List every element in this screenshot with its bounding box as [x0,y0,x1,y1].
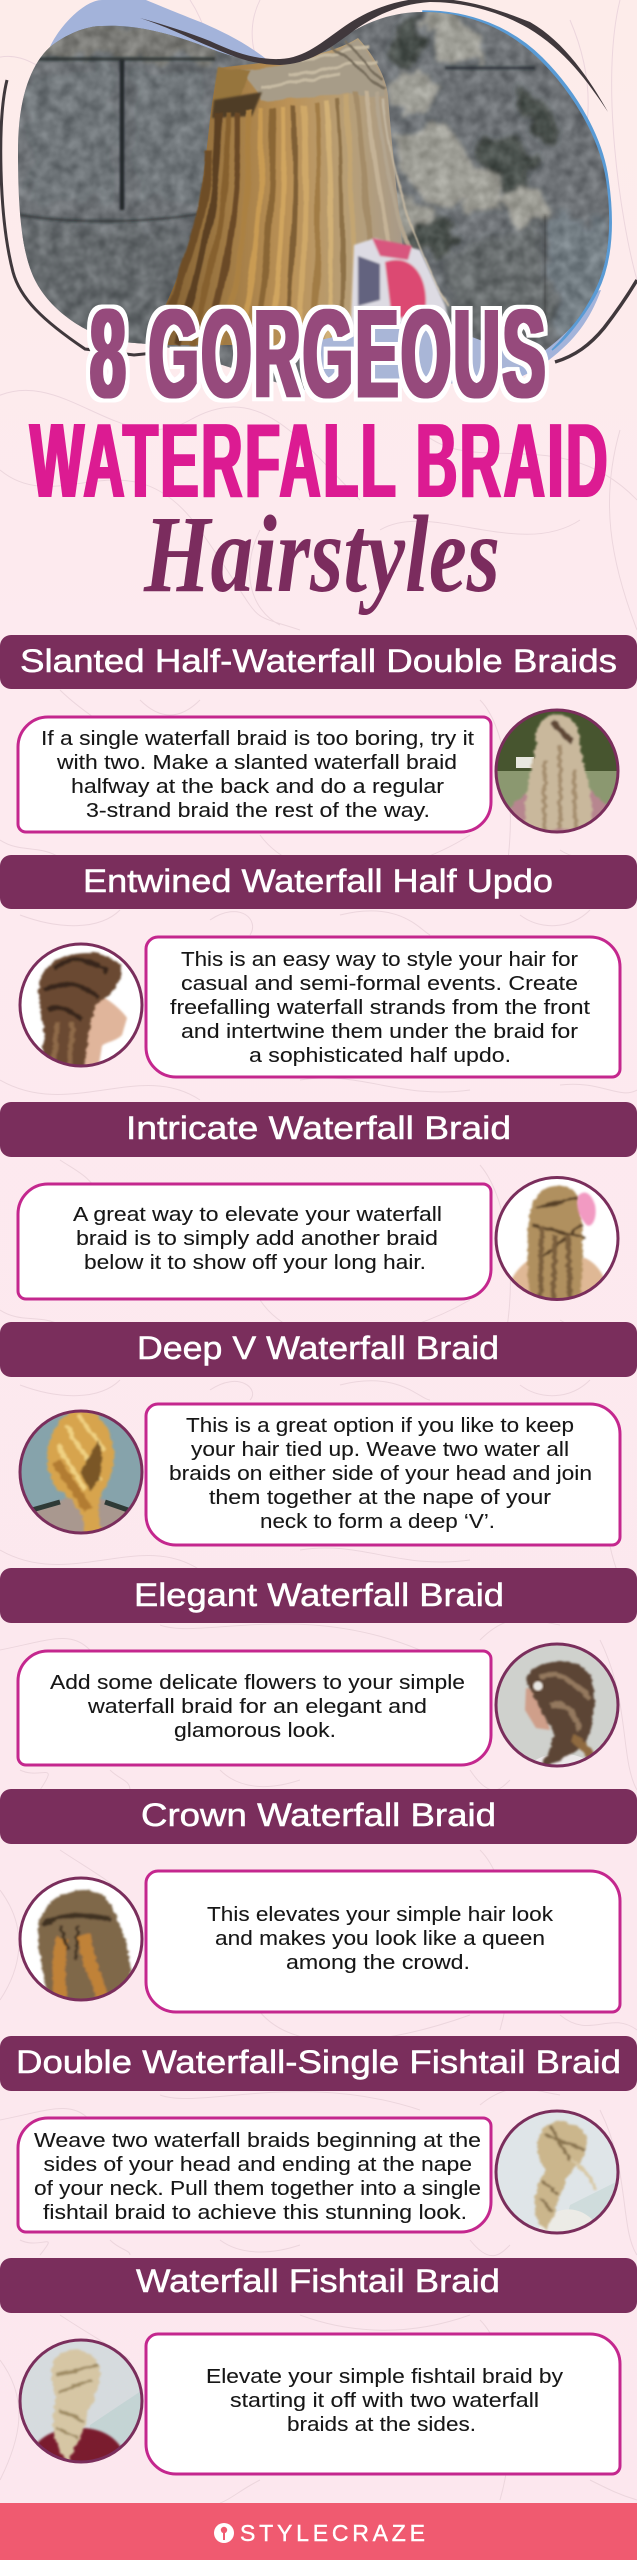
heading bar: Deep V Waterfall Braid [137,1330,499,1366]
text card: starting it off with two waterfall [230,2390,539,2412]
section 3: Intricate Waterfall Braid [0,1102,637,1310]
text card: waterfall braid for an elegant and [87,1696,427,1718]
text card: freefalling waterfall strands from the front [170,997,591,1019]
text card: A great way to elevate your waterfall [73,1204,442,1226]
text card: fishtail braid to achieve this stunning look. [43,2202,467,2224]
text card: a sophisticated half updo. [249,1045,511,1067]
accent: dark curve left [1,80,154,355]
photo: golden braid from behind [18,1410,144,1534]
text card: of your neck. Pull them together into a single [34,2178,481,2200]
text card: This elevates your simple hair look [207,1904,554,1926]
text card: This is a great option if you like to keep [186,1415,574,1437]
title line 3: Hairstyles [143,493,500,615]
section 5: Elegant Waterfall Braid [0,1568,637,1775]
heading bar [0,2036,637,2091]
heading bar [0,1102,637,1157]
photo: dark wavy hair with hairpin [494,1642,620,1768]
text card: This is an easy way to style your hair for [181,949,578,971]
photo: hair and stone wall [18,12,610,390]
text card: neck to form a deep ‘V’. [260,1511,495,1533]
heading bar: Entwined Waterfall Half Updo [83,863,553,899]
heading bar [0,1568,637,1623]
text card [18,2118,491,2232]
photo: brown updo profile [18,942,144,1068]
text card: them together at the nape of your [209,1487,551,1509]
text card [18,1651,491,1765]
heading bar: Elegant Waterfall Braid [134,1577,504,1613]
section 2: Entwined Waterfall Half Updo [0,855,637,1077]
section 7: Double Waterfall-Single Fishtail Braid [0,2036,637,2240]
heading bar: Slanted Half-Waterfall Double Braids [20,643,617,679]
text card: below it to show off your long hair. [84,1252,426,1274]
heading bar [0,1322,637,1377]
text card [146,937,620,1077]
text card [146,1404,620,1545]
text card: 3-strand braid the rest of the way. [86,800,430,822]
heading bar [0,2258,637,2313]
section 8: Waterfall Fishtail Braid [0,2258,637,2474]
text card: sides of your head and ending at the nape [44,2154,472,2176]
text card: If a single waterfall braid is too boring, try it [41,728,475,750]
photo: light brown hair with pink flower [494,1176,620,1301]
photo sub-element: floral top [350,237,450,332]
text card [18,717,491,832]
text card: Add some delicate flowers to your simple [50,1672,465,1694]
section 6: Crown Waterfall Braid [0,1789,637,2012]
accent: dark curve right [555,280,637,362]
photo: crimped brown hair [18,1876,144,2002]
text card: Weave two waterfall braids beginning at the [34,2130,481,2152]
footer [0,2503,637,2560]
photo: blonde fishtail with red top [18,2338,144,2464]
text card: braids at the sides. [287,2414,476,2436]
text card: glamorous look. [174,1720,336,1742]
text card: and intertwine them under the braid for [181,1021,578,1043]
text card: your hair tied up. Weave two water all [191,1439,569,1461]
text card: halfway at the back and do a regular [71,776,444,798]
heading bar [0,1789,637,1844]
text card: with two. Make a slanted waterfall braid [56,752,457,774]
accent: blue edge [423,11,611,350]
brand name: STYLECRAZE [240,2520,425,2546]
hero: photo in blob with curved accents [0,0,637,400]
heading bar: Waterfall Fishtail Braid [136,2263,500,2299]
heading bar [0,635,637,689]
icon: stylecraze logo [214,2523,234,2543]
heading bar: Intricate Waterfall Braid [126,1110,511,1146]
text card [146,1871,620,2012]
text card: casual and semi-formal events. Create [181,973,578,995]
heading bar: Double Waterfall-Single Fishtail Braid [16,2044,621,2080]
text card: Elevate your simple fishtail braid by [206,2366,563,2388]
heading bar: Crown Waterfall Braid [141,1797,496,1833]
text card [146,2334,620,2474]
accent: lavender blob behind photo [50,0,601,392]
heading bar [0,855,637,909]
photo: long blonde hair in park [494,708,620,834]
text card: braid is to simply add another braid [76,1228,438,1250]
title [30,285,610,615]
text card: braids on either side of your head and join [169,1463,592,1485]
photo: blonde fishtail braid [494,2110,620,2234]
section 4: Deep V Waterfall Braid [0,1322,637,1545]
section 1: Slanted Half-Waterfall Double Braids [0,635,637,840]
text card: among the crowd. [286,1952,470,1974]
text card [18,1184,491,1299]
accent: dark swoosh top [140,0,608,112]
text card: and makes you look like a queen [215,1928,545,1950]
photo sub-element: hair mass [150,38,447,345]
